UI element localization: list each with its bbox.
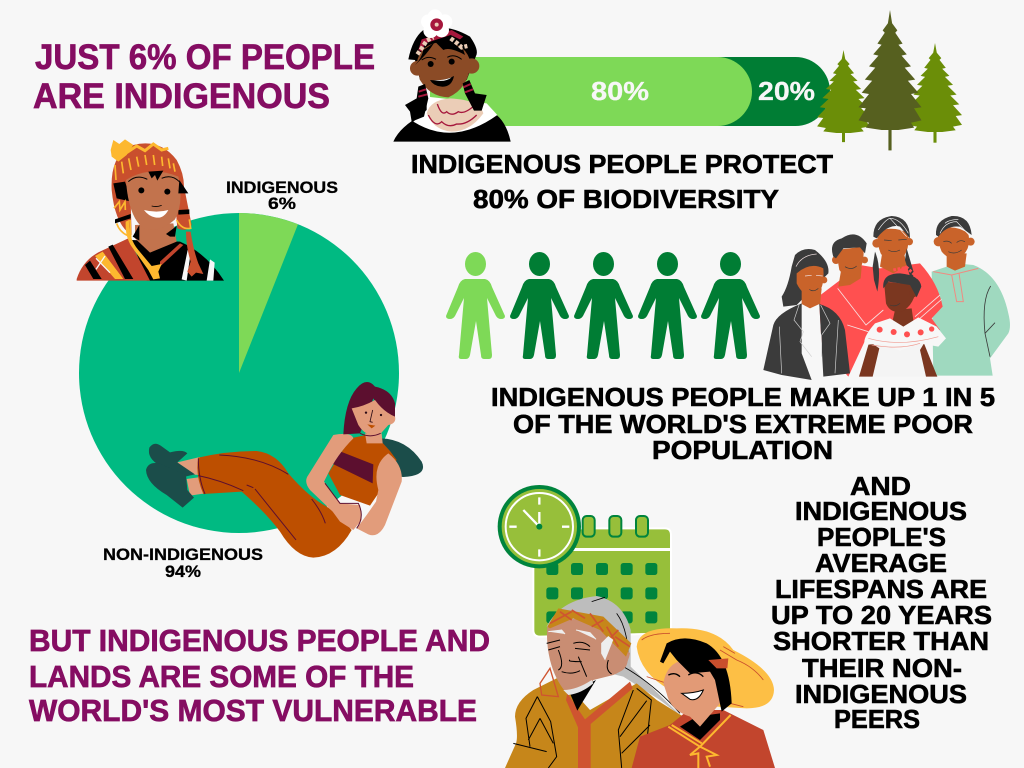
text: average lifespans: UP TO 20 YEARS [771, 600, 992, 630]
text: average lifespans: LIFESPANS ARE [775, 574, 987, 604]
clock [498, 485, 581, 568]
calendar [533, 516, 671, 637]
young man head [832, 234, 868, 287]
heading: 1 in 5 of extreme poor: POPULATION [652, 435, 833, 465]
pie label: indigenous 6%: 6% [268, 194, 296, 213]
pictogram: 1 in 5 people [446, 252, 760, 359]
text: average lifespans: AVERAGE [815, 548, 947, 578]
illustration: three pine trees [817, 10, 962, 150]
title: just 6% of people are indigenous [33, 38, 375, 116]
illustration: elder and child [505, 596, 775, 768]
text: average lifespans: INDIGENOUS [795, 679, 967, 709]
text: average lifespans: THEIR NON- [802, 653, 962, 683]
woman in black jacket [763, 249, 850, 380]
pie label: indigenous 6% [226, 178, 338, 213]
heading: protect 80% of biodiversity: INDIGENOUS PEOPLE PROTECT [411, 149, 833, 179]
man in mint shirt [932, 216, 1010, 376]
bar value: 20%: 20% [758, 76, 815, 106]
flower headdress [421, 9, 452, 38]
girl in white dress [859, 267, 946, 377]
elder [505, 596, 683, 768]
pie label: non-indigenous 94%: NON-INDIGENOUS [103, 545, 263, 564]
text: average lifespans: PEERS [834, 704, 920, 734]
woman in red top [818, 216, 943, 377]
callout: most vulnerable: WORLD'S MOST VULNERABLE [29, 693, 477, 728]
heading: 1 in 5 of extreme poor [491, 382, 995, 465]
title: just 6% of people are indigenous: JUST 6% OF PEOPLE [35, 38, 375, 77]
pie label: non-indigenous 94% [103, 545, 263, 581]
child with straw hat [632, 628, 775, 768]
text: average lifespans [771, 471, 992, 734]
bar value: 80%: 80% [591, 76, 649, 106]
heading: protect 80% of biodiversity [411, 149, 833, 214]
text: average lifespans: PEOPLE'S [817, 522, 946, 552]
pie label: non-indigenous 94%: 94% [165, 562, 201, 581]
illustration: woman leaning back [146, 382, 423, 558]
text: average lifespans: SHORTER THAN [773, 626, 989, 656]
text: average lifespans: AND [850, 471, 911, 501]
pie label: indigenous 6%: INDIGENOUS [226, 178, 338, 197]
title: just 6% of people are indigenous: ARE INDIGENOUS [33, 77, 330, 116]
text: average lifespans: INDIGENOUS [795, 496, 967, 526]
pie chart: indigenous vs non-indigenous [79, 213, 399, 533]
progress bar: 80% and 20% [430, 57, 830, 126]
callout: most vulnerable [29, 623, 490, 728]
heading: 1 in 5 of extreme poor: OF THE WORLD'S EXTREME POOR [513, 409, 973, 439]
heading: protect 80% of biodiversity: 80% OF BIODIVERSITY [473, 184, 779, 214]
illustration: boy in knitted hat [77, 139, 224, 281]
icon: calendar and clock [498, 485, 671, 637]
illustration: girl with flower headdress [393, 9, 511, 142]
heading: 1 in 5 of extreme poor: INDIGENOUS PEOPLE MAKE UP 1 IN 5 [491, 382, 995, 412]
callout: most vulnerable: LANDS ARE SOME OF THE [29, 659, 414, 694]
callout: most vulnerable: BUT INDIGENOUS PEOPLE AND [29, 623, 490, 658]
illustration: group of five indigenous people [763, 216, 1010, 380]
